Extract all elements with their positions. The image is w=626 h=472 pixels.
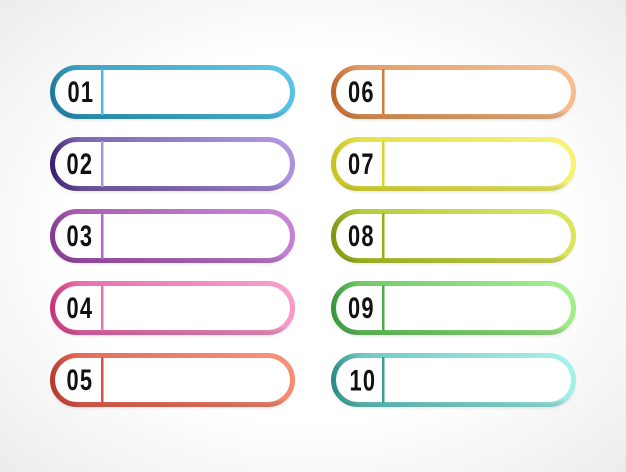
panel: item 05 (51, 356, 294, 408)
panel: item 10 (332, 356, 575, 408)
panel: item 02: 02 (66, 149, 93, 181)
panel: item 10: 10 (350, 365, 376, 397)
panel: item 04 (51, 284, 294, 336)
panel: item 01 (51, 68, 294, 120)
panel: item 09: 09 (348, 293, 375, 325)
panel: item 08: 08 (348, 221, 375, 253)
panel: item 02 (51, 140, 294, 192)
panel: item 04: 04 (66, 293, 93, 325)
panel: item 08 (332, 212, 575, 264)
panel: item 03 (51, 212, 294, 264)
panel: item 09 (332, 284, 575, 336)
panel: item 07: 07 (348, 149, 375, 181)
panel: item 01: 01 (68, 77, 94, 109)
panel: item 03: 03 (66, 221, 93, 253)
panel: item 07 (332, 140, 575, 192)
panel: item 06 (332, 68, 575, 120)
panel: item 06: 06 (348, 77, 375, 109)
panel: item 05: 05 (66, 365, 93, 397)
